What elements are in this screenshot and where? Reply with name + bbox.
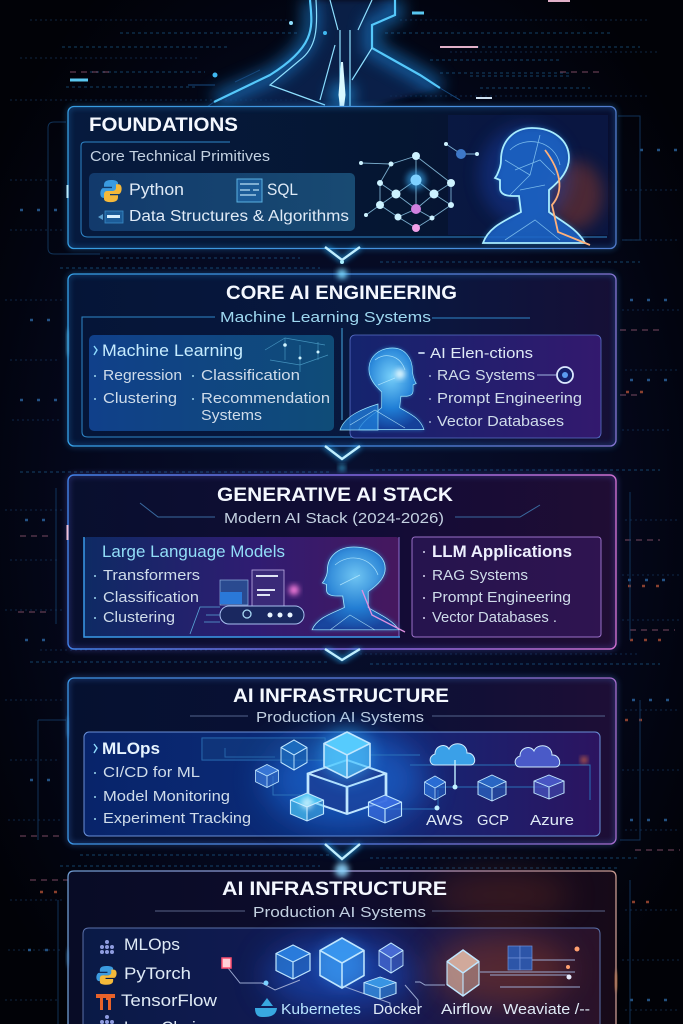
subheading: machine learning systems: Machine Learning Systems (220, 309, 431, 326)
subheading: modern ai stack: Modern AI Stack (2024-2026) (224, 510, 444, 527)
list: mlops topics (95, 765, 251, 827)
illustration: head facing left (312, 547, 405, 632)
labels: tools: Docker (373, 1001, 422, 1018)
icon: python (100, 180, 122, 202)
icon: kubernetes whale (255, 998, 277, 1017)
arrow: core ai to generative ai (325, 446, 360, 471)
list: ai applications: RAG Systems (437, 368, 535, 384)
labels: cloud providers: GCP (477, 812, 509, 829)
list: llm topics: Transformers (103, 568, 200, 584)
panel: generative ai stack (66, 475, 616, 649)
label: data structures and algorithms: Data Structures & Algorithms (129, 208, 349, 225)
labels: tools: Airflow (441, 1001, 492, 1018)
list: ml topics: Regression (103, 368, 182, 384)
heading: generative ai stack: GENERATIVE AI STACK (217, 485, 453, 506)
illustration: head profile (483, 128, 590, 245)
list: llm applications: RAG Systems (432, 568, 528, 584)
panel: ai infrastructure tools (66, 863, 617, 1024)
heading: foundations: FOUNDATIONS (89, 115, 238, 136)
label: mlops: MLOps (124, 936, 180, 954)
panel: core ai engineering (66, 269, 616, 446)
list: mlops topics: Model Monitoring (103, 789, 230, 805)
icon: data structures (98, 211, 123, 223)
list: ml topics: Classification (201, 368, 300, 384)
labels: cloud providers (426, 812, 574, 829)
illustration: ui windows (190, 570, 304, 634)
heading: ai infrastructure: AI INFRASTRUCTURE (233, 686, 449, 707)
diagram: container cubes (202, 729, 590, 823)
list: ml topics (95, 368, 330, 424)
list: ml topics: Recommendation (201, 391, 330, 407)
icon: pytorch (96, 966, 117, 985)
list: ai applications (419, 353, 582, 430)
subheading: core technical primitives: Core Technical Primitives (90, 148, 270, 165)
list: ai applications: Prompt Engineering (437, 391, 582, 407)
outer circuit frames (38, 116, 640, 1024)
diagram: cloud services (424, 744, 587, 801)
labels: cloud providers: Azure (530, 812, 574, 829)
list: llm topics (95, 568, 200, 626)
icon: chevron (94, 744, 97, 753)
labels: tools: Weaviate /-- (503, 1001, 590, 1018)
card: mlops (84, 729, 600, 836)
heading: core ai engineering: CORE AI ENGINEERING (226, 283, 457, 304)
label: machine learning: Machine Learning (102, 341, 243, 360)
label: tensorflow: TensorFlow (121, 991, 218, 1010)
list: ai applications: Vector Databases (437, 414, 564, 430)
label: python: Python (129, 180, 184, 199)
panel: ai infrastructure mlops (66, 678, 616, 844)
list: mlops topics: Experiment Tracking (103, 811, 251, 827)
heading: ai infrastructure: AI INFRASTRUCTURE (222, 879, 447, 900)
diagram: tool cubes (222, 938, 580, 1012)
labels: tools: Kubernetes (281, 1001, 361, 1018)
icon: langchain dots (100, 1015, 114, 1024)
icon: tensorflow (96, 994, 115, 1010)
list: llm topics: Classification (103, 590, 199, 606)
card: tools (83, 928, 600, 1024)
labels: cloud providers: AWS (426, 812, 463, 829)
card: machine learning (89, 335, 334, 431)
card: large language models (84, 537, 400, 637)
label: pytorch: PyTorch (124, 964, 191, 983)
arrow: foundations to core ai (325, 247, 360, 264)
label: mlops: MLOps (102, 739, 160, 758)
network graph (359, 142, 479, 232)
label: llm applications: LLM Applications (432, 542, 572, 561)
illustration: head facing right (340, 348, 424, 430)
labels: tools (281, 1001, 590, 1018)
list: mlops topics: CI/CD for ML (103, 765, 200, 781)
icon: sql (237, 179, 262, 202)
skills card (89, 173, 355, 231)
icon: mlops dots (100, 940, 114, 954)
subheading: production ai systems: Production AI Systems (256, 709, 424, 726)
panel: foundations (66, 106, 616, 248)
illustration: glowing neck figure (188, 0, 460, 125)
label: ai elections: AI Elen-ctions (430, 345, 533, 362)
list: llm applications (424, 552, 571, 626)
icon: rag badge (537, 367, 573, 383)
subheading: production ai systems: Production AI Systems (253, 904, 426, 921)
card: llm applications (412, 537, 601, 637)
connector node at top of foundations (333, 117, 351, 135)
card: ai applications (350, 335, 601, 438)
arrow: generative ai to infrastructure (325, 649, 360, 660)
label: large language models: Large Language Models (102, 542, 285, 561)
list: llm applications: Prompt Engineering (432, 590, 571, 606)
list: llm applications: Vector Databases . (432, 610, 557, 626)
label: sql: SQL (267, 180, 298, 199)
arrow: infrastructure to production (325, 844, 360, 859)
icon: chevron (94, 346, 97, 355)
list: ml topics: Clustering (103, 391, 177, 407)
list: ml topics: Systems (201, 408, 262, 424)
list: llm topics: Clustering (103, 610, 175, 626)
